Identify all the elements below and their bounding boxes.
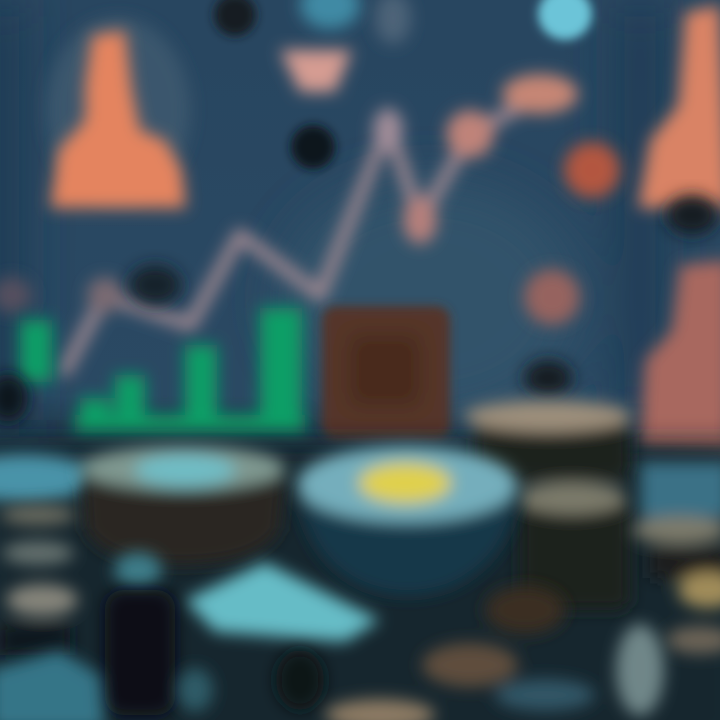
icon: bottom coins: [325, 586, 664, 720]
icon: dark dot centre: [291, 125, 335, 169]
icon: pink figure lower right: [640, 260, 720, 455]
icon: centre bowl: [297, 446, 518, 595]
icon: halo behind left figure: [46, 18, 190, 202]
icon: pink dot right: [524, 269, 580, 325]
line chart: pale trend line: [0, 74, 578, 370]
icon: dark marker left: [0, 374, 28, 422]
icon: light blue shape top centre: [300, 0, 360, 29]
icon: small teal dot: [114, 552, 162, 588]
icon: blue corner bottom left: [0, 650, 105, 720]
icon: light blue shape top right: [538, 0, 592, 40]
icon: cyan block: [185, 562, 380, 642]
icon: brown book: [322, 306, 450, 440]
icon: red circle right: [564, 142, 620, 198]
icon: dark marker above stack: [524, 360, 572, 396]
icon: dark dot top: [214, 0, 256, 36]
icon: lower right figure base: [632, 462, 720, 654]
icon: left bowl: [81, 446, 285, 565]
icon: orange figure top left: [50, 30, 186, 208]
icon: dark bottle: [105, 590, 175, 715]
bar chart: green bars: [20, 308, 305, 433]
floor band: [0, 445, 720, 720]
icon: blue surface left: [0, 454, 95, 502]
icon: orange figure top right: [638, 5, 720, 208]
icon: coin stack right: [464, 400, 632, 610]
icon: dark dot right: [666, 195, 718, 235]
icon: pink shape top: [280, 50, 352, 92]
icon: coins left: [0, 505, 78, 655]
icon: dark bottom shapes: [276, 650, 324, 710]
icon: pale shape top centre: [375, 0, 411, 44]
icon: dark marker on chart: [129, 265, 181, 305]
icon: teal reflection bottom: [177, 668, 213, 712]
